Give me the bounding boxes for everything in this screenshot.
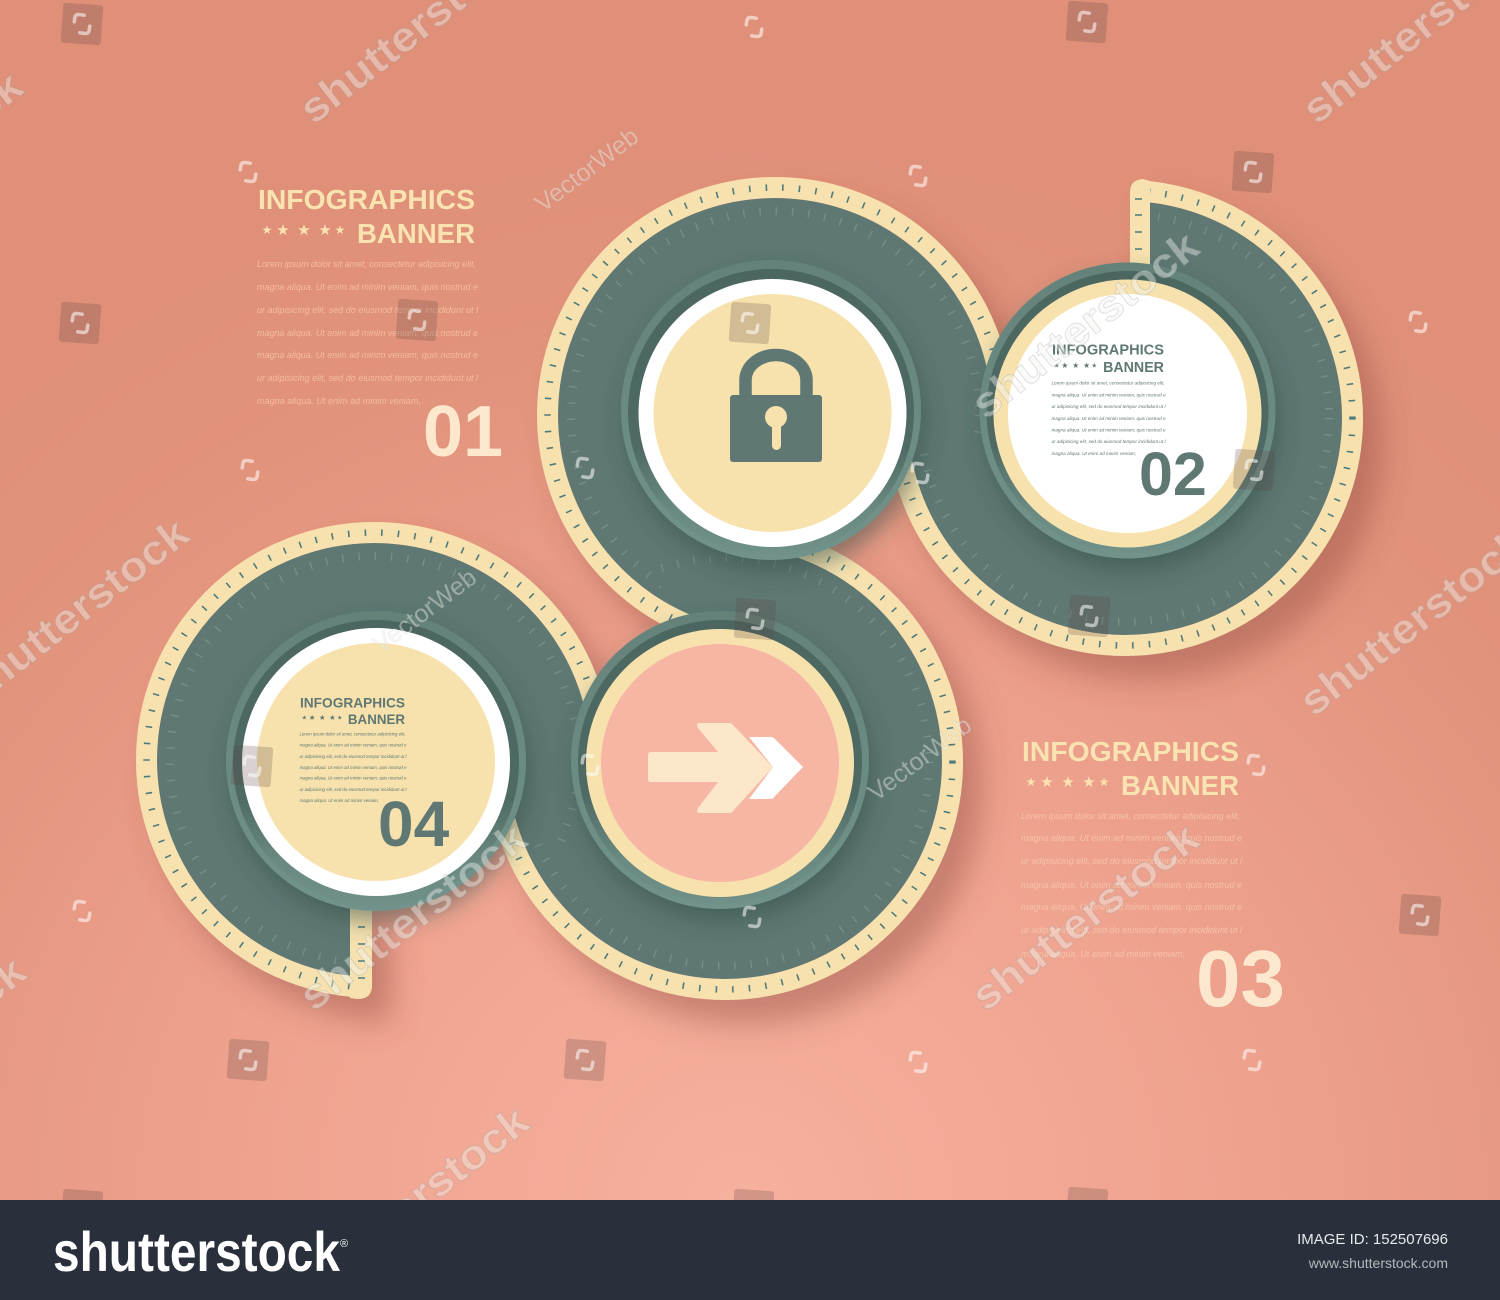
text block: banner 04: ur adipisicing elit, sed do eiusmod tempor incididunt ut l — [300, 754, 408, 759]
text block: banner 03: magna aliqua. Ut enim ad minim veniam, quis nostrud e — [1021, 880, 1242, 890]
text block: banner 02: Lorem ipsum dolor sit amet, consectetur adipisicing elit, — [1051, 380, 1164, 385]
text block: banner 01: magna aliqua. Ut enim ad minim veniam, — [257, 396, 421, 406]
watermark overlay: shutterstock — [290, 813, 536, 1019]
text block: banner 01: ★ — [276, 221, 290, 239]
watermark overlay: VectorWeb — [863, 711, 977, 807]
panel: arrow circle — [571, 611, 869, 909]
icon: arrow — [648, 723, 803, 813]
text block: banner 04: magna aliqua. Ut enim ad minim veniam, quis nostrud e — [300, 776, 407, 781]
text block: banner 01: ur adipisicing elit, sed do eiusmod tempor incididunt ut l — [257, 373, 479, 383]
text block: banner 04: magna aliqua. Ut enim ad minim veniam, quis nostrud e — [300, 743, 407, 748]
text block: banner 03: ★ — [1061, 773, 1075, 791]
text block: banner 01: magna aliqua. Ut enim ad minim veniam, quis nostrud e — [257, 282, 478, 292]
text block: banner 01: ★ — [262, 223, 272, 237]
text block: banner 03: ur adipisicing elit, sed do eiusmod tempor incididunt ut l — [1021, 856, 1243, 866]
band arc: left circle green — [170, 556, 578, 964]
cream ruler edge: right circle — [898, 190, 1352, 646]
text block: banner 04: ★ — [309, 713, 316, 722]
footer url: www.shutterstock.com — [1308, 1255, 1448, 1271]
cream tab at end of left arc — [350, 905, 372, 999]
text block: banner 03: INFOGRAPHICS — [1022, 736, 1239, 767]
text block: banner 02: magna aliqua. Ut enim ad minim veniam, — [1051, 451, 1136, 456]
text block: banner 02: ★ — [1061, 361, 1068, 370]
text block: banner 03: Lorem ipsum dolor sit amet, consectetur adipisicing elit, — [1021, 811, 1240, 821]
panel: circle 02 — [980, 262, 1276, 558]
text block: banner 04: magna aliqua. Ut enim ad minim veniam, — [300, 798, 379, 803]
image id: IMAGE ID: 152507696 — [1297, 1231, 1448, 1248]
watermark overlay: shutterstock — [962, 221, 1208, 427]
text block: banner 01: INFOGRAPHICS — [258, 184, 475, 215]
text block: banner 02: ur adipisicing elit, sed do eiusmod tempor incididunt ut l — [1051, 439, 1166, 444]
text block: banner 02: magna aliqua. Ut enim ad minim veniam, quis nostrud e — [1051, 427, 1166, 432]
text block: banner 03: ★ — [1040, 773, 1054, 791]
number 03: 03 — [1196, 934, 1285, 1023]
watermark overlay: shutterstock — [962, 813, 1208, 1019]
text block: banner 04: Lorem ipsum dolor sit amet, consectetur adipisicing elit, — [300, 732, 406, 737]
text block: banner 01: magna aliqua. Ut enim ad minim veniam, quis nostrud e — [257, 328, 478, 338]
text block: banner 02: ★ — [1054, 362, 1060, 369]
text block: banner 04: ★ — [302, 715, 307, 722]
watermark overlay: shutterstock — [292, 1096, 538, 1300]
text block: banner 01: ★ — [318, 221, 332, 239]
icon: padlock — [730, 355, 822, 462]
panel: lock circle — [621, 260, 921, 560]
text block: banner 02 — [1051, 342, 1166, 456]
text block: banner 01: Lorem ipsum dolor sit amet, consectetur adipisicing elit, — [257, 259, 476, 269]
text block: banner 03 — [1021, 736, 1243, 959]
cream tab at start of right arc — [1130, 179, 1150, 275]
band arc: lower centre circle green — [521, 558, 929, 966]
text block: banner 01 — [257, 184, 479, 406]
text block: banner 01: magna aliqua. Ut enim ad minim veniam, quis nostrud e — [257, 350, 478, 360]
text block: banner 01: ★ — [335, 223, 345, 237]
band arc: top circle green — [571, 211, 979, 619]
text block: banner 03: ★ — [1082, 773, 1096, 791]
text block: banner 03: ★ — [1099, 775, 1109, 789]
text block: banner 03: magna aliqua. Ut enim ad minim veniam, quis nostrud e — [1021, 902, 1242, 912]
band arc: right circle green — [921, 214, 1329, 622]
text block: banner 02: ur adipisicing elit, sed do eiusmod tempor incididunt ut l — [1051, 404, 1166, 409]
text block: banner 03: BANNER — [1121, 770, 1239, 801]
registered mark: ® — [340, 1238, 348, 1250]
panel: circle 04 — [226, 611, 526, 911]
text block: banner 02: ★ — [1083, 361, 1090, 370]
text block: banner 01: BANNER — [357, 218, 475, 249]
text block: banner 02: ★ — [1092, 362, 1098, 369]
text block: banner 02: magna aliqua. Ut enim ad minim veniam, quis nostrud e — [1051, 392, 1166, 397]
text block: banner 04: ★ — [319, 713, 326, 722]
footer logo: shutterstock — [53, 1220, 341, 1283]
text block: banner 04: ur adipisicing elit, sed do eiusmod tempor incididunt ut l — [300, 787, 408, 792]
text block: banner 02: INFOGRAPHICS — [1052, 342, 1164, 358]
text block: banner 02: magna aliqua. Ut enim ad minim veniam, quis nostrud e — [1051, 416, 1166, 421]
text block: banner 04: ★ — [329, 713, 336, 722]
text block: banner 04: magna aliqua. Ut enim ad minim veniam, quis nostrud e — [300, 765, 407, 770]
text block: banner 04 — [300, 696, 408, 803]
swirl band: four connected dial arcs — [146, 179, 1352, 999]
text block: banner 04: ★ — [337, 715, 342, 722]
cream ruler edge: top circle — [548, 188, 1002, 642]
number 04: 04 — [378, 788, 450, 860]
cream ruler edge: left circle — [146, 532, 602, 988]
text block: banner 03: ★ — [1026, 775, 1036, 789]
text block: banner 02: BANNER — [1103, 360, 1165, 376]
number 01: 01 — [423, 392, 503, 472]
text block: banner 02: ★ — [1072, 361, 1079, 370]
cream ruler edge: lower centre circle — [498, 534, 952, 990]
watermark overlay: VectorWeb — [530, 122, 644, 218]
text block: banner 01: ★ — [297, 221, 311, 239]
text block: banner 04: INFOGRAPHICS — [300, 696, 405, 711]
text block: banner 04: BANNER — [348, 712, 405, 727]
number 02: 02 — [1139, 440, 1207, 508]
watermark overlay: VectorWeb — [368, 563, 482, 659]
text block: banner 03: magna aliqua. Ut enim ad minim veniam, quis nostrud e — [1021, 833, 1242, 843]
footer bar — [0, 1200, 1500, 1300]
text block: banner 03: magna aliqua. Ut enim ad minim veniam, — [1021, 949, 1185, 959]
text block: banner 01: ur adipisicing elit, sed do eiusmod tempor incididunt ut l — [257, 305, 479, 315]
text block: banner 03: ur adipisicing elit, sed do eiusmod tempor incididunt ut l — [1021, 925, 1243, 935]
